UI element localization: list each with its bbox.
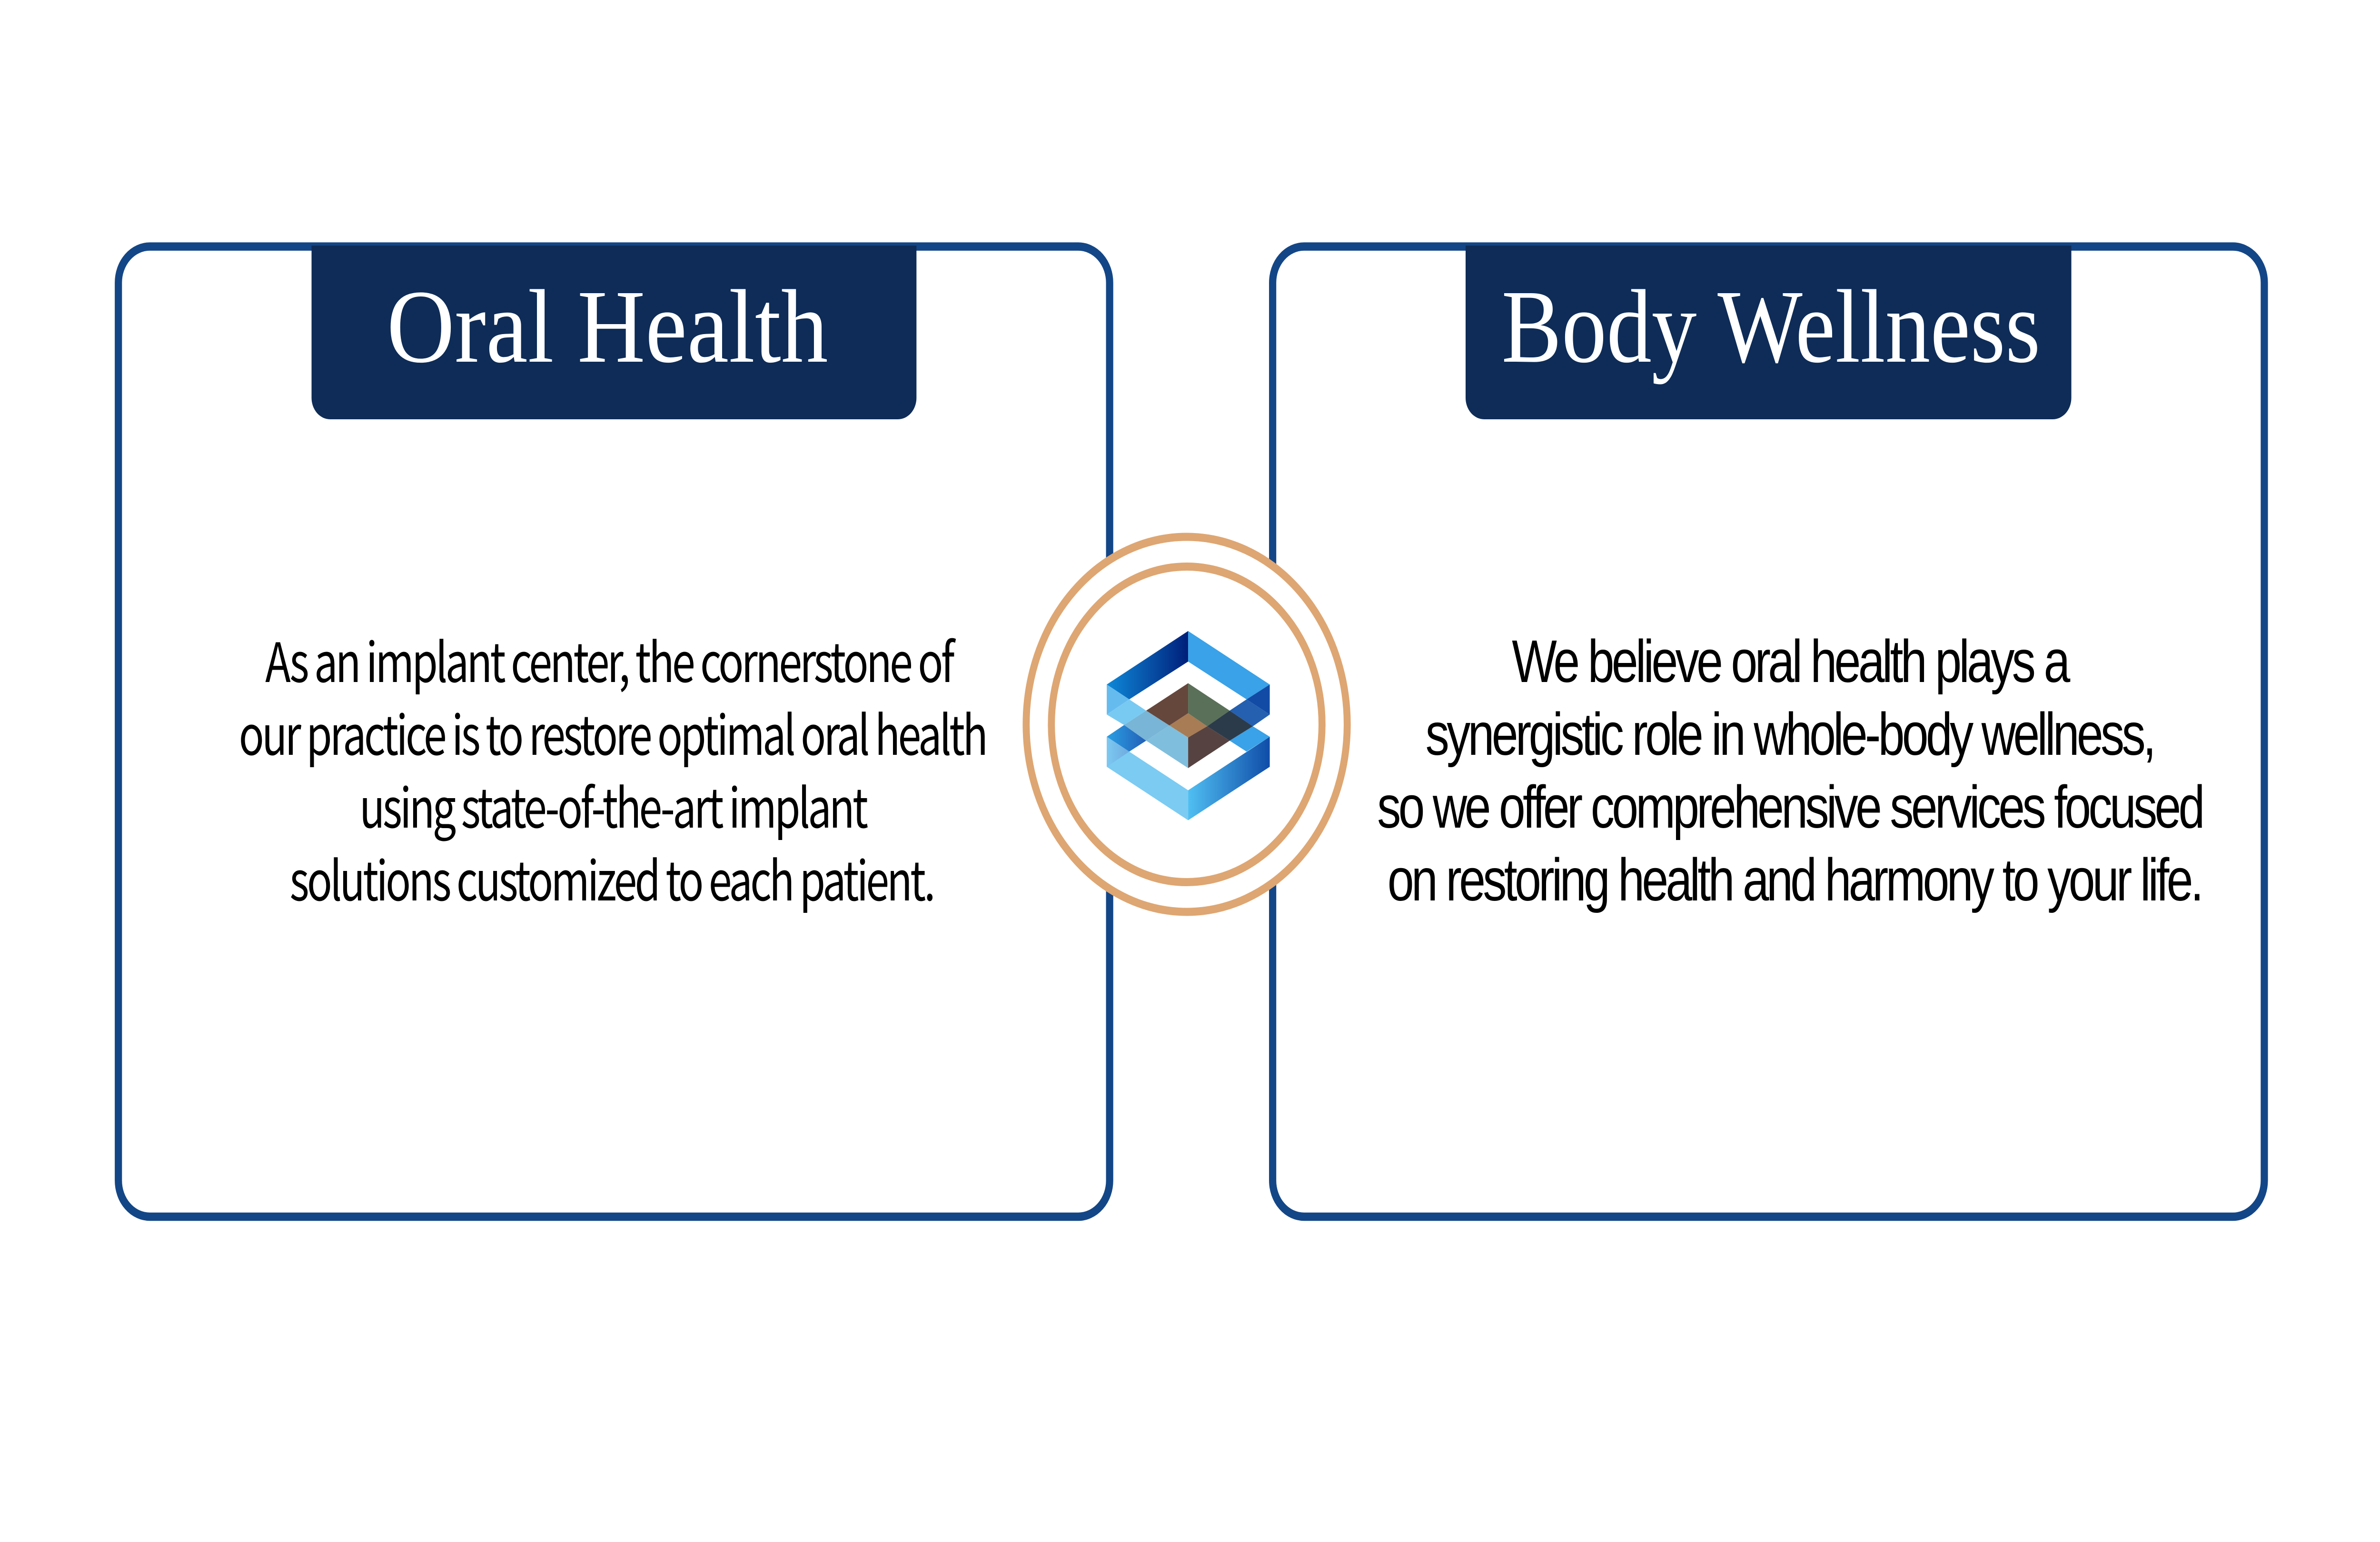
text block: body wellness description xyxy=(1377,628,2202,914)
text block: body wellness description: We believe oral health plays a xyxy=(1512,628,2071,695)
heading: oral health: Oral Health xyxy=(387,268,828,385)
text block: oral health description: our practice is to restore optimal oral health xyxy=(239,692,986,771)
panel frame: oral health xyxy=(119,247,1110,1216)
panel: oral health xyxy=(119,246,1110,1216)
text block: oral health description xyxy=(239,619,986,916)
panel frame: body wellness xyxy=(1273,247,2264,1216)
panel: body wellness xyxy=(1273,246,2264,1216)
heading tab: oral health xyxy=(312,246,916,419)
text block: oral health description: solutions customized to each patient. xyxy=(290,838,933,916)
text block: body wellness description: synergistic role in whole-body wellness, xyxy=(1426,701,2153,768)
text block: body wellness description: so we offer comprehensive services focused xyxy=(1377,774,2202,841)
icon: layered diamond logo xyxy=(1107,631,1270,820)
heading: body wellness: Body Wellness xyxy=(1502,268,2040,385)
center emblem xyxy=(1026,537,1347,912)
text block: body wellness description: on restoring health and harmony to your life. xyxy=(1388,847,2201,914)
outer ring xyxy=(1026,537,1347,912)
text block: oral health description: As an implant center, the cornerstone of xyxy=(265,619,956,698)
heading tab: body wellness xyxy=(1466,246,2072,419)
inner ring xyxy=(1051,566,1322,882)
text block: oral health description: using state-of-the-art implant xyxy=(359,765,868,843)
